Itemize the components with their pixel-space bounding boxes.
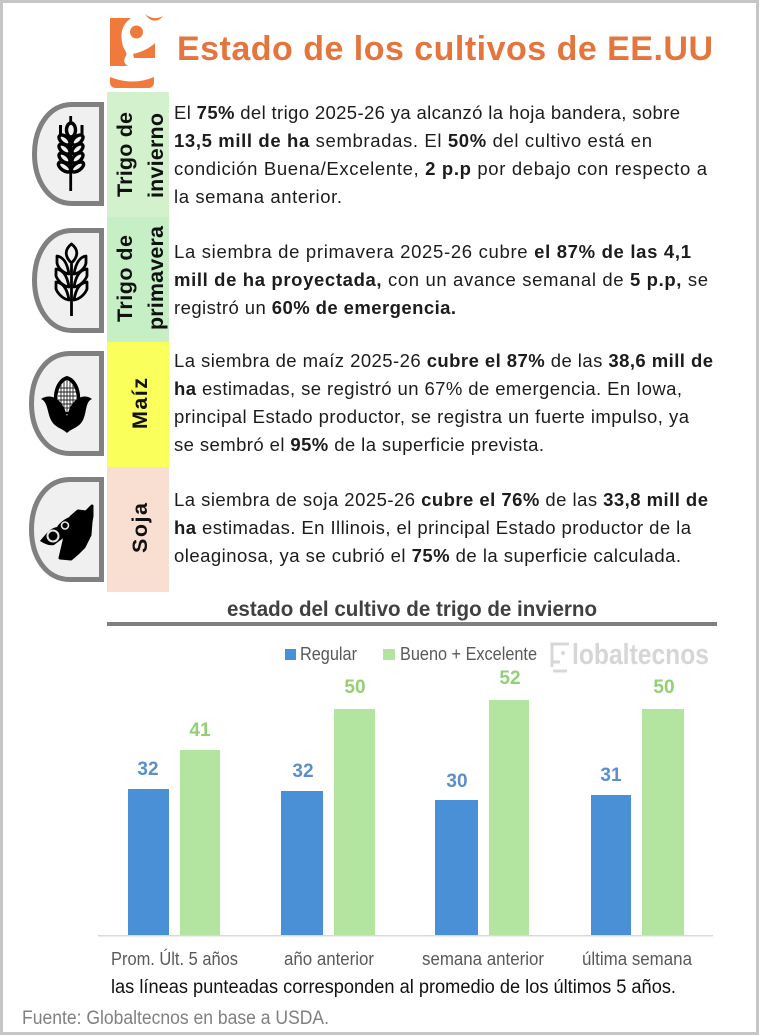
title: Estado de los cultivos de EE.UU [177,30,713,68]
label strip: trigo de invierno [107,92,169,217]
chart note: las líneas punteadas corresponden al promedio de los últimos 5 años. [111,977,676,998]
bars: Prom. Últ. 5 años: 41 [189,720,211,741]
panel: soja [32,467,708,592]
text block: trigo de invierno: 13,5 mill de ha sembradas. El 50% del cultivo está en [174,130,652,151]
text block: soja [174,489,708,566]
label strip: maíz [107,342,169,467]
label strip: soja: Soja [128,502,152,553]
text block: trigo de invierno: El 75% del trigo 2025-26 ya alcanzó la hoja bandera, sobre [174,102,680,123]
label strip: trigo de invierno: Trigo de [113,112,137,197]
text block: trigo de invierno: condición Buena/Excelente, 2 p.p por debajo con respecto a [174,158,708,179]
icon: spring wheat [34,230,102,330]
panel: trigo de primavera [34,217,708,342]
icon: winter wheat [34,104,102,204]
logo [110,14,163,88]
text block: trigo de primavera: registró un 60% de emergencia. [174,297,456,318]
text block: soja: oleaginosa, ya se cubrió el 75% de la superficie calculada. [174,545,681,566]
bars: semana anterior: 30 [446,771,468,792]
text block: maíz: principal Estado productor, se registra un fuerte impulso, ya [174,406,690,427]
bars: año anterior: 50 [344,677,366,698]
label strip: maíz: Maíz [128,378,152,429]
watermark: Globaltecnos: lobaltecnos [572,639,709,671]
bars: semana anterior: 52 [499,668,521,689]
legend: Regular [300,644,357,664]
panel: trigo de invierno [34,92,708,217]
legend: Bueno + Excelente [400,644,537,664]
text block: maíz: La siembra de maíz 2025-26 cubre el 87% de las 38,6 mill de [174,350,713,371]
text block: trigo de primavera: mill de ha proyectada, con un avance semanal de 5 p.p, se [174,269,708,290]
icon: soybean [32,480,102,580]
source: Fuente: Globaltecnos en base a USDA. [22,1008,329,1029]
chart heading: estado del cultivo de trigo de invierno [227,598,597,621]
text block: trigo de primavera: La siembra de primavera 2025-26 cubre el 87% de las 4,1 [174,241,691,262]
text block: trigo de invierno: la semana anterior. [174,186,342,207]
legend [285,644,537,664]
bars: semana anterior [435,668,529,935]
bars: última semana [591,677,684,935]
bars: Prom. Últ. 5 años: 32 [137,759,159,780]
axis labels [111,948,693,969]
label strip: soja [107,467,169,592]
bars: año anterior: 32 [292,761,314,782]
bar chart: estado del cultivo de trigo de invierno [98,598,717,969]
axis labels: semana anterior [422,949,544,969]
icon: corn [32,354,102,454]
text block: maíz [174,350,713,455]
text block: maíz: se sembró el 95% de la superficie prevista. [174,434,544,455]
axis labels: año anterior [284,949,374,969]
label strip: trigo de primavera: primavera [144,225,168,330]
bars: última semana: 31 [600,765,622,786]
text block: maíz: ha estimadas, se registró un 67% de emergencia. En Iowa, [174,378,682,399]
bars: última semana: 50 [653,677,675,698]
panel: maíz [32,342,713,467]
text block: soja: La siembra de soja 2025-26 cubre el 76% de las 33,8 mill de [174,489,708,510]
text block: soja: ha estimadas. En Illinois, el principal Estado productor de la [174,517,692,538]
text block: trigo de invierno [174,102,708,207]
axis labels: última semana [582,949,693,969]
label strip: trigo de invierno: invierno [144,113,168,198]
bars: Prom. Últ. 5 años [128,720,220,935]
bars: año anterior [281,677,375,935]
label strip: trigo de primavera [107,217,169,342]
text block: trigo de primavera [174,241,708,318]
axis labels: Prom. Últ. 5 años [111,948,238,969]
label strip: trigo de primavera: Trigo de [113,235,137,322]
